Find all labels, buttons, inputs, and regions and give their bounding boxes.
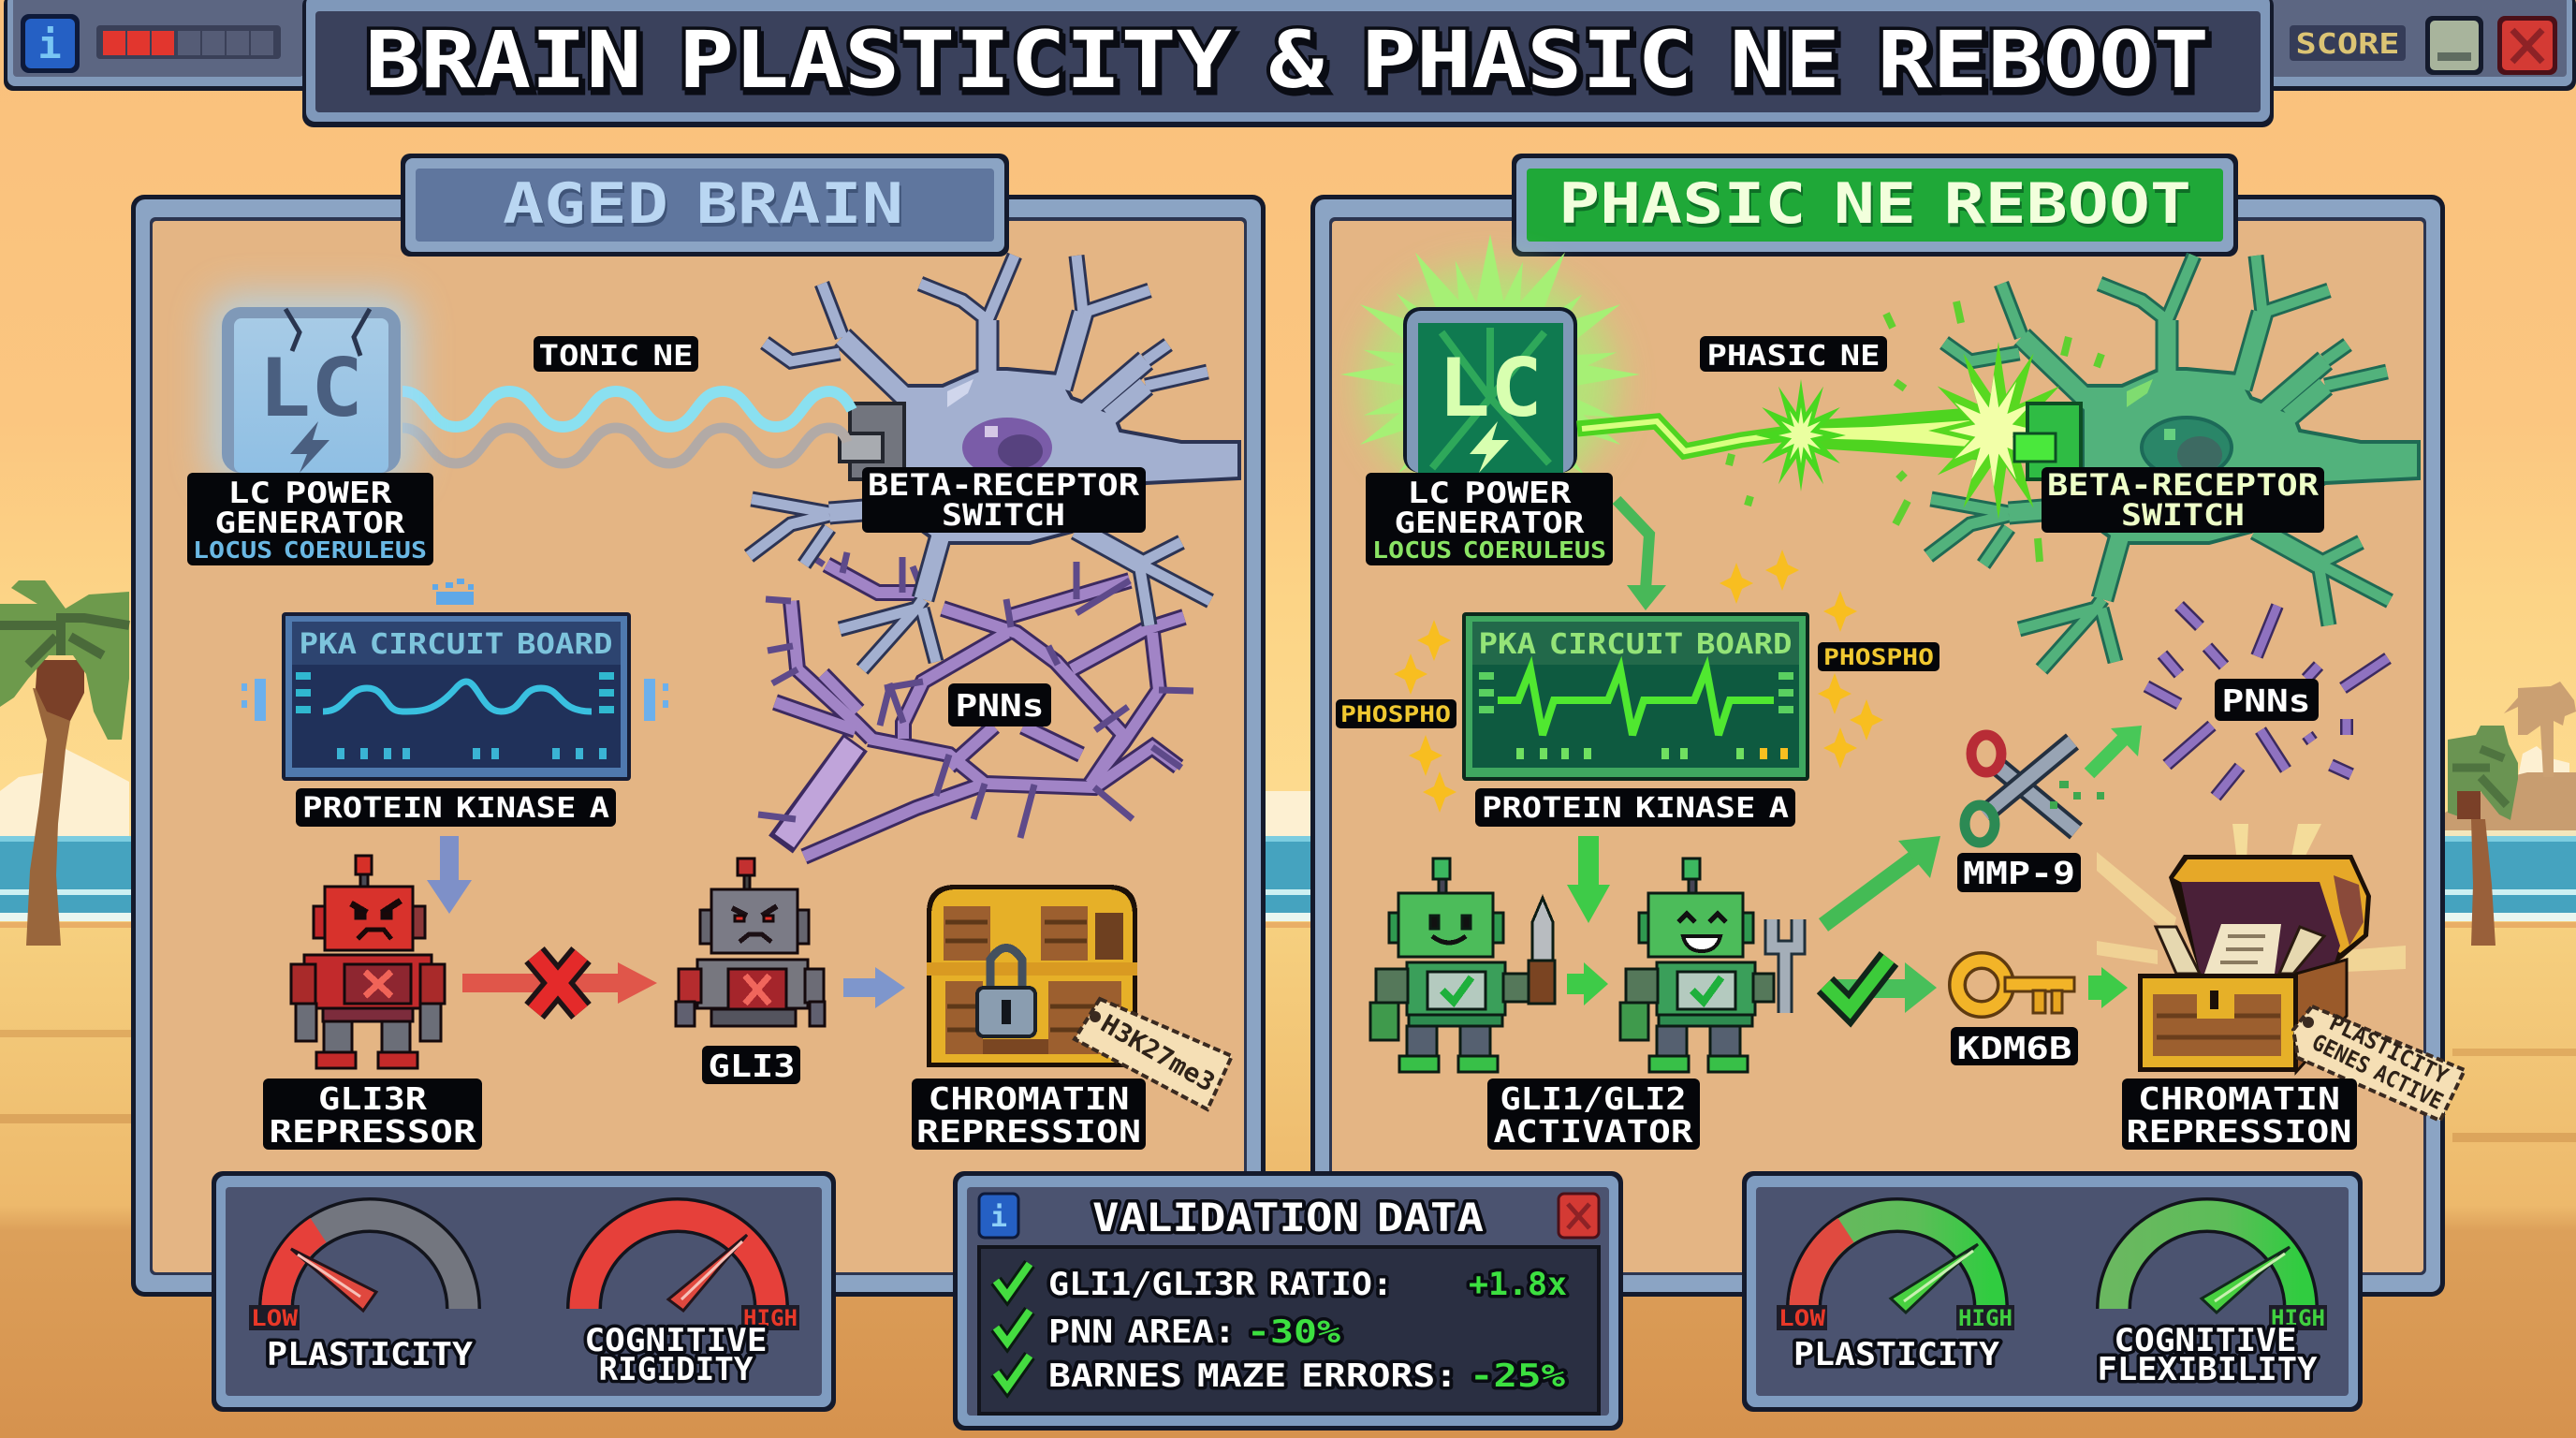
row: GLI1/GLI3R ratio: +1.8x <box>1469 1266 1567 1303</box>
heading: validation data: VALIDATION DATA <box>1092 1195 1484 1240</box>
gauge: cognitive rigidity high <box>584 1215 771 1311</box>
icon: info: i <box>990 1201 1007 1234</box>
icon: LC generator aged: LC <box>258 342 363 435</box>
arrow: key to chest <box>2088 967 2128 1008</box>
label: LC power generator aged: LOCUS COERULEUS <box>193 536 427 564</box>
label: phospho left: PHOSPHO <box>1340 701 1451 727</box>
label: GLI1/GLI2 activator: GLI1/GLI2 <box>1500 1080 1687 1117</box>
label: LC power generator active: LC POWER <box>1408 477 1572 510</box>
label: KDM6B <box>1951 1027 2078 1066</box>
tag: plasticity genes active: GENES ACTIVE <box>2308 1029 2447 1115</box>
label: chromatin repression active: REPRESSION <box>2127 1113 2351 1150</box>
arrow: PKA to repressor <box>427 836 472 914</box>
label: protein kinase A active <box>1475 788 1795 827</box>
icon: minimise button <box>2425 16 2483 75</box>
health bar <box>96 25 281 59</box>
panel: reboot gauges <box>1742 1171 2363 1412</box>
label: LC power generator aged: LC POWER <box>228 477 392 510</box>
icon: big check <box>1825 959 1889 1009</box>
icon: dim signal left of PKA <box>242 679 266 721</box>
label: PNNs aged: PNNs <box>955 687 1045 724</box>
label: LC power generator active: LOCUS COERULEUS <box>1372 536 1606 564</box>
arrow: GLI3 to chromatin <box>843 967 905 1008</box>
icon: green robot with wrench <box>1620 858 1798 1072</box>
sparkles: phosphorylation <box>1394 550 1883 813</box>
wave: tonic NE <box>402 391 852 463</box>
label: PNNs aged <box>948 683 1051 726</box>
panel: aged brain <box>131 195 1266 1297</box>
panel: phasic NE reboot <box>1310 195 2445 1297</box>
PKA circuit board aged <box>282 612 631 781</box>
tag: H3K27me3: H3K27me3 <box>1096 1009 1220 1098</box>
title: BRAIN PLASTICITY & PHASIC NE REBOOT <box>365 14 2209 106</box>
label: beta receptor active <box>2042 467 2324 533</box>
row: PNN area: -30% <box>1247 1313 1341 1351</box>
label: protein kinase A aged: PROTEIN KINASE A <box>302 792 609 825</box>
label: chromatin repression aged <box>912 1078 1146 1150</box>
label: KDM6B: KDM6B <box>1956 1030 2072 1066</box>
icon: info button: i <box>37 22 62 67</box>
row: GLI1/GLI3R ratio <box>996 1264 1567 1303</box>
score label <box>2290 25 2406 61</box>
icon: receptor switch aged <box>840 404 904 479</box>
top left status bar <box>4 0 313 91</box>
arrow: check to KDM6B <box>1825 959 1937 1013</box>
arrow: activator to MMP-9 <box>1823 836 1940 925</box>
arrow: scissors to PNNs <box>2089 726 2142 773</box>
label: chromatin repression active: CHROMATIN <box>2138 1080 2340 1117</box>
label: PNNs active: PNNs <box>2222 682 2310 719</box>
label: high: HIGH <box>743 1305 798 1331</box>
label: beta receptor aged <box>862 467 1146 533</box>
label: cognitive rigidity: COGNITIVE <box>584 1322 768 1359</box>
row: Barnes maze errors: BARNES MAZE ERRORS: <box>1048 1357 1457 1395</box>
icon: LC generator active: LC <box>1438 342 1543 435</box>
heading tab: aged brain: AGED BRAIN <box>503 171 903 237</box>
burst: LC glow <box>1331 227 1649 540</box>
icon: grey robot GLI3 <box>676 858 825 1026</box>
label: cognitive flexibility: FLEXIBILITY <box>2097 1351 2318 1388</box>
PNN thorn network <box>758 552 1193 857</box>
label: high flexibility: HIGH <box>2271 1305 2325 1331</box>
label: chromatin repression aged: REPRESSION <box>916 1113 1141 1150</box>
label: MMP-9 <box>1957 853 2081 892</box>
palm tree right <box>2448 726 2518 946</box>
icon: info <box>979 1194 1018 1238</box>
label: cognitive flexibility <box>2097 1322 2318 1388</box>
icon: receptor switch active <box>2014 404 2081 479</box>
arrow: blocked repressor pathway <box>462 955 657 1011</box>
icon: golden key <box>1957 961 2074 1013</box>
label: GLI3: GLI3 <box>708 1048 796 1084</box>
label: tonic NE: TONIC NE <box>539 340 693 373</box>
icon: close button <box>2497 16 2557 75</box>
icon: LC generator active <box>1403 307 1577 473</box>
label: low: LOW <box>1778 1305 1826 1331</box>
gauge: cognitive flexibility high <box>2114 1215 2301 1313</box>
neuron: aged <box>749 256 1239 669</box>
label: plasticity: PLASTICITY <box>1793 1336 2000 1373</box>
row: Barnes maze errors <box>996 1356 1566 1395</box>
panel: aged gauges <box>212 1171 836 1412</box>
row: PNN area: PNN AREA: <box>1048 1313 1236 1351</box>
icon: green robot with knife <box>1370 858 1555 1072</box>
icon: dim signal right of PKA <box>644 679 668 721</box>
label: phospho right: PHOSPHO <box>1823 644 1934 670</box>
label: cognitive rigidity <box>584 1322 768 1388</box>
label: LC power generator active: GENERATOR <box>1395 506 1585 540</box>
label: LC power generator aged <box>187 473 433 565</box>
top right status bar <box>2265 0 2576 91</box>
label: GLI3R repressor <box>263 1078 482 1150</box>
label: chromatin repression active <box>2122 1078 2357 1150</box>
icon: LC generator aged <box>208 293 415 487</box>
heading tab: phasic NE reboot <box>1512 154 2238 257</box>
icon: close <box>1559 1194 1599 1238</box>
data screen <box>979 1247 1599 1414</box>
PNN fragments <box>2146 606 2388 797</box>
gauge: plasticity high <box>1804 1215 1991 1313</box>
label: chromatin repression aged: CHROMATIN <box>929 1080 1129 1117</box>
tag: plasticity genes active: PLASTICITY <box>2325 1009 2452 1090</box>
label: MMP-9: MMP-9 <box>1963 855 2075 891</box>
heading tab: phasic NE reboot: PHASIC NE REBOOT <box>1559 171 2191 237</box>
beam: phasic NE <box>1577 301 2101 562</box>
arrow: knife robot to wrench robot <box>1567 962 1608 1005</box>
title bar <box>302 0 2274 127</box>
score label: SCORE <box>2295 28 2400 61</box>
label: LC power generator active <box>1366 473 1613 565</box>
label: beta receptor aged: BETA-RECEPTOR <box>868 467 1140 503</box>
label: GLI3R repressor: REPRESSOR <box>270 1113 476 1150</box>
icon: info button <box>21 14 80 73</box>
label: phasic NE: PHASIC NE <box>1707 340 1880 373</box>
palm tree left <box>0 580 129 946</box>
PKA circuit board aged: PKA CIRCUIT BOARD <box>300 628 612 661</box>
PKA circuit board active <box>1462 612 1809 781</box>
icon: padlock <box>977 947 1035 1036</box>
label: low: LOW <box>251 1305 299 1331</box>
heading tab: aged brain <box>401 154 1009 257</box>
icon: scissors MMP-9 <box>1965 735 2104 843</box>
icon: locked chest <box>927 885 1137 1067</box>
arrow: PKA to activators <box>1567 836 1610 923</box>
icon: open chest with light rays <box>2097 824 2406 1072</box>
label: plasticity: PLASTICITY <box>267 1336 474 1373</box>
icon: red cross <box>534 955 581 1011</box>
label: cognitive rigidity: RIGIDITY <box>599 1351 754 1388</box>
row: PNN area <box>996 1311 1341 1351</box>
label: PNNs active <box>2215 679 2319 721</box>
icon: dim signal above PKA <box>432 579 474 605</box>
icon: red robot GLI3R <box>291 856 445 1068</box>
label: beta receptor active: SWITCH <box>2121 497 2245 533</box>
label: GLI1/GLI2 activator: ACTIVATOR <box>1494 1113 1693 1150</box>
label: protein kinase A aged <box>296 788 616 827</box>
label: GLI1/GLI2 activator <box>1487 1078 1700 1150</box>
label: LC power generator aged: GENERATOR <box>215 506 405 540</box>
row: GLI1/GLI3R ratio: GLI1/GLI3R RATIO: <box>1048 1266 1393 1303</box>
label: high plasticity: HIGH <box>1958 1305 2012 1331</box>
neuron: reboot <box>1928 256 2419 669</box>
row: Barnes maze errors: -25% <box>1470 1357 1566 1395</box>
label: protein kinase A active: PROTEIN KINASE A <box>1482 792 1789 825</box>
tag: H3K27me3 <box>1075 999 1232 1109</box>
label: beta receptor active: BETA-RECEPTOR <box>2047 467 2320 503</box>
label: GLI3R repressor: GLI3R <box>318 1080 427 1117</box>
distant palm silhouette <box>2504 682 2576 777</box>
arrow: LC to PKA <box>1617 500 1666 610</box>
panel: validation data <box>953 1171 1623 1431</box>
label: cognitive flexibility: COGNITIVE <box>2114 1322 2297 1359</box>
PKA circuit board active: PKA CIRCUIT BOARD <box>1479 628 1792 661</box>
label: beta receptor aged: SWITCH <box>942 497 1065 533</box>
gauge: plasticity low <box>276 1215 463 1311</box>
